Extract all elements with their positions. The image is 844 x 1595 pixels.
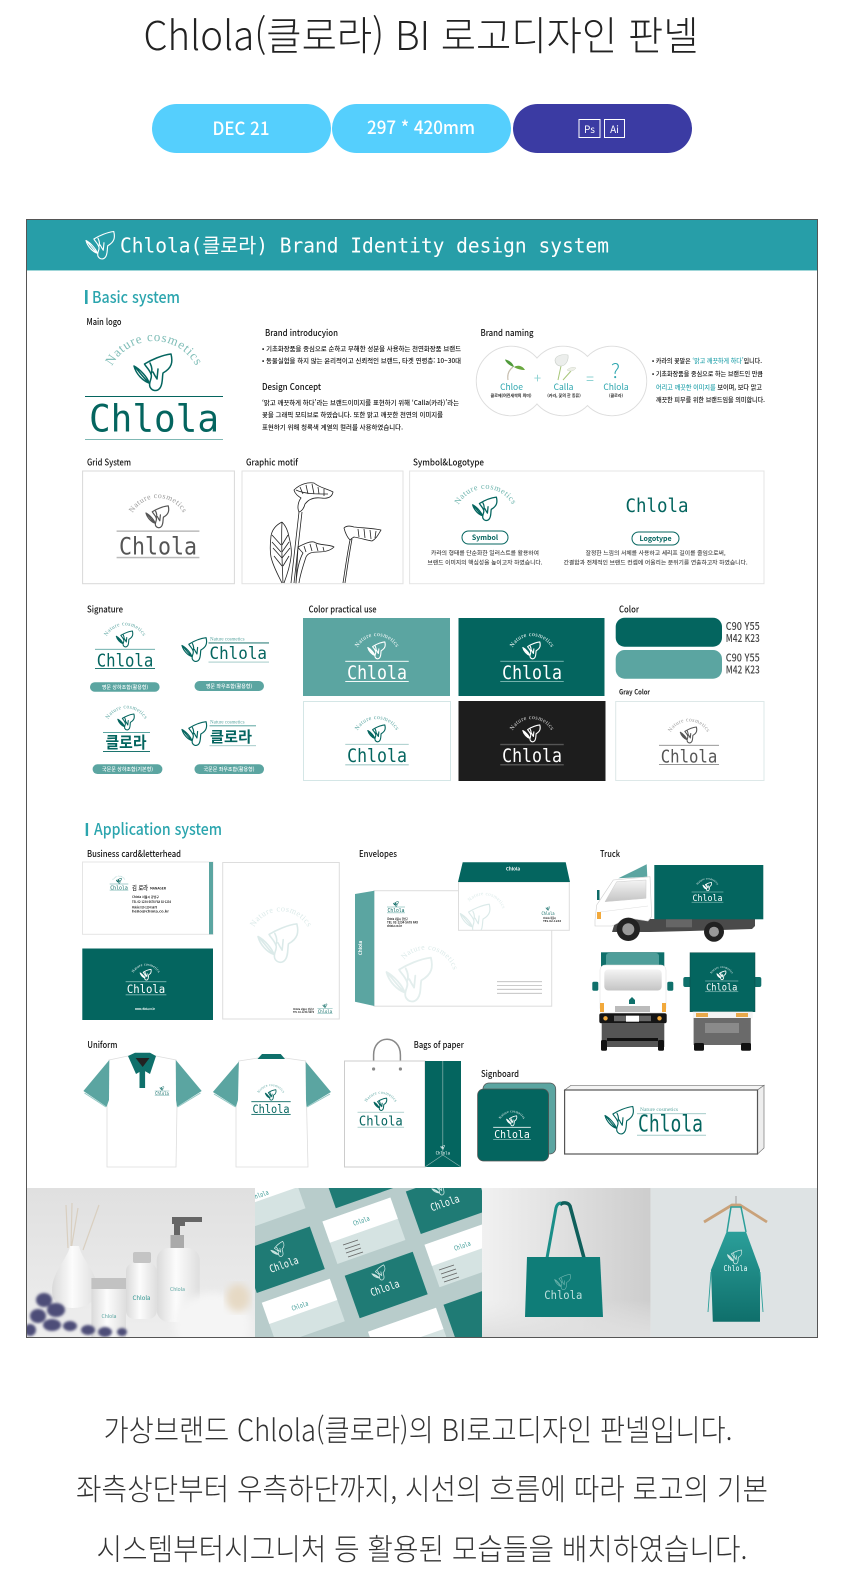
color card: gray: Chlola: [661, 747, 717, 767]
main logo: Nature cosmetics: [105, 335, 200, 366]
large envelope: Nature cosmetics: [400, 946, 456, 970]
diagram: brand naming circles: Calla: [554, 381, 574, 393]
business card front: MANAGER: [150, 886, 166, 890]
long signboard: Chlola: [638, 1112, 703, 1138]
label: Envelopes: Envelopes: [359, 847, 397, 860]
pill: Logotype: Logotype: [640, 534, 672, 544]
swatch: mint: M42 K23: [726, 662, 760, 678]
color card: mint: [303, 618, 450, 696]
color card: white: Nature cosmetics: [354, 716, 398, 730]
diagram: brand naming circles: (카라, 꽃의 한 종류): [547, 392, 581, 399]
caption: logotype: 간결함과 전체적인 브랜드 컨셉에 어울리는 분위기를 연출하고자 하였습니다.: [564, 558, 748, 566]
text block: design concept: 꽃을 그래픽 모티브로 하였습니다. 또한 맑고 깨끗한 천연의 이미지를: [262, 409, 443, 419]
icon: sprout: [505, 360, 525, 380]
letterhead: TEL 02-1234-5678: [293, 1010, 314, 1014]
label: Brand naming: Brand naming: [480, 326, 534, 339]
color card: mint: Nature cosmetics: [354, 633, 398, 648]
square signboard: Chlola: [494, 1128, 530, 1141]
color card: black: Nature cosmetics: [510, 716, 554, 730]
diagram: brand naming circles: =: [586, 369, 594, 389]
card logos: Chlola: [291, 1300, 309, 1313]
label: Uniform: Uniform: [87, 1038, 117, 1051]
truck side view: [594, 864, 764, 942]
label: Main logo: Main logo: [86, 315, 122, 328]
pill: Symbol: Symbol: [472, 533, 499, 543]
logotype: Chlola: [626, 496, 688, 517]
card logos: Chlola: [352, 1215, 371, 1228]
label: Gray Color: Gray Color: [619, 688, 651, 698]
color card: white: Chlola: [347, 746, 407, 767]
caption: logotype: 잘정한 느낌의 서체를 사용하고 세리프 길이를 줄임으로써,: [586, 549, 726, 557]
photo: cosmetics bottles: [27, 1188, 255, 1337]
color card: deep teal: [458, 618, 604, 696]
panel header bar: Chlola(클로라) Brand Identity design system: [120, 234, 609, 258]
panel: symbol and logotype: [409, 470, 764, 584]
uniform back: Nature cosmetics: [257, 1084, 284, 1093]
text block: brand introduction: • 동물실험을 하지 않는 윤리적이고 신뢰적인 브랜드, 타겟 연령층: 10~30대: [262, 355, 461, 365]
white cards: [255, 1188, 482, 1337]
business card front: hello@chlola.co.kr: [132, 910, 170, 914]
large envelope: [355, 890, 552, 1007]
text block: brand introduction: Brand introducyion: [265, 326, 338, 339]
panel: grid system: Nature cosmetics: [128, 494, 186, 513]
text block: brand introduction: • 기초화장품을 중심으로 순하고 무해한 성분을 사용하는 천연화장품 브랜드: [262, 343, 461, 353]
teal cards: [255, 1188, 482, 1337]
large envelope: Chlola: [388, 908, 404, 914]
business card back: Nature cosmetics: [132, 964, 160, 973]
tag pills: [152, 104, 692, 153]
signature: English horizontal: [182, 638, 269, 691]
signature: English horizontal: Chlola: [210, 644, 267, 664]
panel: brand identity board: [26, 219, 818, 1338]
panel header bar: [27, 220, 817, 271]
diagram: brand naming circles: [476, 346, 647, 416]
card logos: Chlola: [429, 1193, 461, 1214]
business card front: Chlola: [110, 885, 128, 891]
signature: Korean vertical: 국문문 상하조합(기본형): [102, 766, 153, 773]
label: Color practical use: Color practical use: [309, 602, 377, 616]
business card front: Mobile 010-1234-5678: [132, 905, 157, 909]
business card back: www.chlola.co.kr: [135, 1007, 156, 1011]
uniform back: Chlola: [252, 1102, 290, 1116]
small envelope: TEL 02-1234: [543, 919, 562, 923]
truck rear view: Nature cosmetics: [710, 966, 733, 974]
diagram: brand naming circles: Chloe: [500, 381, 523, 393]
diagram: brand naming circles: 클로에(여린새싹의 의미): [491, 392, 532, 399]
signature: Korean horizontal: 클로라: [210, 726, 252, 747]
square signboard: [477, 1082, 556, 1162]
heading: Basic system: Basic system: [92, 284, 180, 308]
paper bag: Nature cosmetics: [364, 1092, 396, 1102]
main logo: [85, 335, 223, 441]
business card front: Chlola 서울시 강남구: [132, 894, 159, 899]
swatch: deep teal: M42 K23: [726, 630, 760, 646]
color card: deep teal: Chlola: [502, 663, 562, 684]
color card: gray: Nature cosmetics: [668, 718, 710, 732]
pill: tools: Ps: [584, 121, 595, 136]
paper bag: [344, 1038, 462, 1168]
text block: naming meaning: • 카라의 꽃말은 ‘맑고 깨끗하게 하다’입니다.: [652, 355, 762, 365]
photo: tote bag: [482, 1188, 651, 1337]
caption: symbol: 브랜드 이미지의 핵심성을 높이고자 하였습니다.: [428, 558, 543, 566]
signature: Korean horizontal: [182, 720, 264, 774]
signature: Korean vertical: 클로라: [106, 729, 147, 753]
description text: 가상브랜드 Chlola(클로라)의 BI로고디자인 판넬입니다.: [104, 1406, 732, 1450]
text block: naming meaning: • 기초화장품을 중심으로 하는 브랜드인 만큼: [652, 368, 763, 378]
business card front: 김 로라: [132, 882, 148, 892]
color card: black: [458, 701, 606, 781]
signature: Korean horizontal: 국문문 좌우조합(활용형): [204, 766, 255, 773]
uniform back: [213, 1054, 331, 1168]
pill: tools: Ai: [610, 121, 619, 136]
pill: tools: [513, 104, 692, 153]
title: Chlola(클로라) BI 로고디자인 판넬: [144, 4, 698, 62]
heading: Application system: Application system: [94, 816, 222, 840]
letterhead: Chlola 서울시 강남구: [293, 1007, 315, 1011]
pill: size: [332, 104, 511, 153]
diagram: brand naming circles: (클로라): [609, 392, 624, 399]
text block: design concept: ‘맑고 깨끗하게 하다’라는 브랜드이미지를 표현하기 위해 ‘Calla(카라)’라는: [262, 397, 459, 407]
swatch: deep teal: [616, 618, 760, 647]
pill: Symbol: [462, 531, 508, 544]
signature: Korean horizontal: Nature cosmetics: [210, 720, 245, 726]
color card: mint: Chlola: [347, 663, 407, 684]
color card: black: Chlola: [502, 746, 562, 767]
caption: logotype: [564, 549, 748, 566]
label: Graphic motif: Graphic motif: [246, 456, 299, 468]
business card front: TEL 02-1234-5678 FAX 02-1234: [132, 900, 171, 904]
uniform front: [83, 1053, 202, 1167]
photo: cosmetics bottles: Chlola: [133, 1293, 150, 1302]
panel: grid system: [82, 470, 235, 584]
icon: calla flower: [555, 355, 576, 380]
truck rear view: [683, 952, 762, 1051]
diagram: brand naming circles: +: [534, 368, 541, 387]
signature: English vertical: [90, 622, 160, 692]
paper bag: Chlola: [436, 1150, 450, 1156]
panel: grid system: Chlola: [119, 532, 197, 560]
business card back: Chlola: [127, 982, 165, 996]
pill: Logotype: [632, 532, 679, 545]
photo: cosmetics bottles: Chlola: [102, 1313, 117, 1320]
photo: tote bag: Chlola: [544, 1288, 582, 1302]
diagram: brand naming circles: Chlola: [603, 381, 629, 393]
label: Business card & letterhead: Business card&letterhead: [87, 847, 181, 860]
large envelope: chlola.co.kr: [387, 924, 403, 928]
letterhead: [222, 862, 340, 1020]
label: Color: Color: [619, 602, 639, 616]
paper bag: Chlola: [359, 1113, 403, 1129]
swatch: mint: C90 Y55: [726, 650, 760, 666]
caption: symbol: [428, 549, 543, 566]
color card: gray: [615, 701, 764, 781]
truck side view: Nature cosmetics: [696, 878, 718, 885]
photo: cosmetics bottles: Chlola: [170, 1286, 185, 1293]
card logos: Chlola: [251, 1189, 270, 1202]
text block: naming meaning: [652, 355, 765, 404]
letterhead: Nature cosmetics: [250, 908, 311, 927]
letterhead: Chlola: [318, 1009, 332, 1015]
truck front view: [592, 952, 673, 1051]
square signboard: Nature cosmetics: [498, 1110, 525, 1119]
symbol mark: [454, 485, 516, 522]
business card front: Nature cosmetics: [112, 876, 126, 880]
long signboard: [565, 1085, 764, 1154]
swatch: mint: [616, 650, 760, 679]
small envelope: [458, 862, 570, 931]
card logos: Chlola: [453, 1240, 472, 1253]
text block: naming meaning: 어리고 깨끗한 이미지를 보이며, 보다 맑고: [656, 382, 762, 392]
large envelope: Chlola 서울시 강남구: [387, 917, 408, 921]
business card front: [82, 862, 214, 935]
text block: design concept: [262, 380, 459, 432]
pill: size: 297 * 420mm: [367, 114, 475, 140]
card logos: Chlola: [369, 1278, 401, 1299]
truck rear view: Chlola: [706, 982, 737, 993]
signature: English vertical: Chlola: [97, 651, 153, 671]
signature: English vertical: Nature cosmetics: [104, 622, 146, 636]
description text: [76, 1406, 768, 1569]
description text: 좌측상단부터 우측하단까지, 시선의 흐름에 따라 로고의 기본: [76, 1465, 768, 1509]
long signboard: Nature cosmetics: [640, 1107, 678, 1113]
text block: naming meaning: 깨끗한 피부를 위한 브랜드임을 의미합니다.: [656, 394, 765, 404]
label: Symbol & Logotype: Symbol&Logotype: [413, 456, 484, 468]
small envelope: Chlola 서울시: [543, 916, 556, 920]
label: Bags of paper: Bags of paper: [414, 1038, 464, 1051]
panel: graphic motif line drawing: [242, 471, 403, 584]
card logos: Chlola: [268, 1255, 300, 1276]
color card: white: [303, 701, 451, 781]
label: Truck: Truck: [600, 847, 621, 860]
text block: design concept: Design Concept: [262, 380, 321, 393]
caption: symbol: 카라의 형태를 단순화한 일러스트를 활용하여: [431, 549, 539, 557]
label: Signboard: Signboard: [481, 1067, 519, 1080]
label: Grid System: Grid System: [87, 456, 131, 468]
small envelope: Nature cosmetics: [468, 892, 504, 908]
signature: English vertical: 영문 상하조합(활용형): [102, 684, 148, 691]
diagram: brand naming circles: ?: [611, 355, 620, 384]
uniform front: Chlola: [155, 1091, 169, 1096]
color card: deep teal: Nature cosmetics: [510, 633, 554, 648]
photo: apron: Chlola: [724, 1264, 748, 1273]
main logo: Chlola: [89, 398, 219, 441]
truck side view: Chlola: [693, 893, 722, 904]
photo: apron: [651, 1188, 817, 1337]
photo: business cards pattern: [255, 1188, 482, 1337]
description text: 시스템부터시그니처 등 활용된 모습들을 배치하였습니다.: [96, 1525, 748, 1569]
signature: English horizontal: Nature cosmetics: [210, 638, 245, 642]
symbol mark: Nature cosmetics: [454, 485, 516, 504]
swatch: deep teal: C90 Y55: [726, 618, 760, 634]
pill: date: DEC 21: [212, 115, 270, 141]
label: Signature: Signature: [87, 602, 123, 616]
card logos: [255, 1188, 471, 1310]
signature: English horizontal: 영문 좌우조합(활용형): [206, 683, 252, 690]
pill: date: [152, 104, 331, 153]
signature: Korean vertical: Nature cosmetics: [105, 706, 147, 720]
text block: design concept: 표현하기 위해 청록색 계열의 컬러를 사용하였습니다.: [262, 422, 403, 432]
text block: brand introduction: [262, 326, 461, 365]
large envelope: TEL 02-1234-5678 FAX: [387, 920, 418, 924]
large envelope: Chlola: [358, 941, 364, 955]
signature: Korean vertical: [92, 706, 162, 774]
small envelope: Chlola: [541, 911, 555, 916]
small envelope: Chlola: [506, 866, 520, 872]
business card back: [82, 948, 213, 1020]
